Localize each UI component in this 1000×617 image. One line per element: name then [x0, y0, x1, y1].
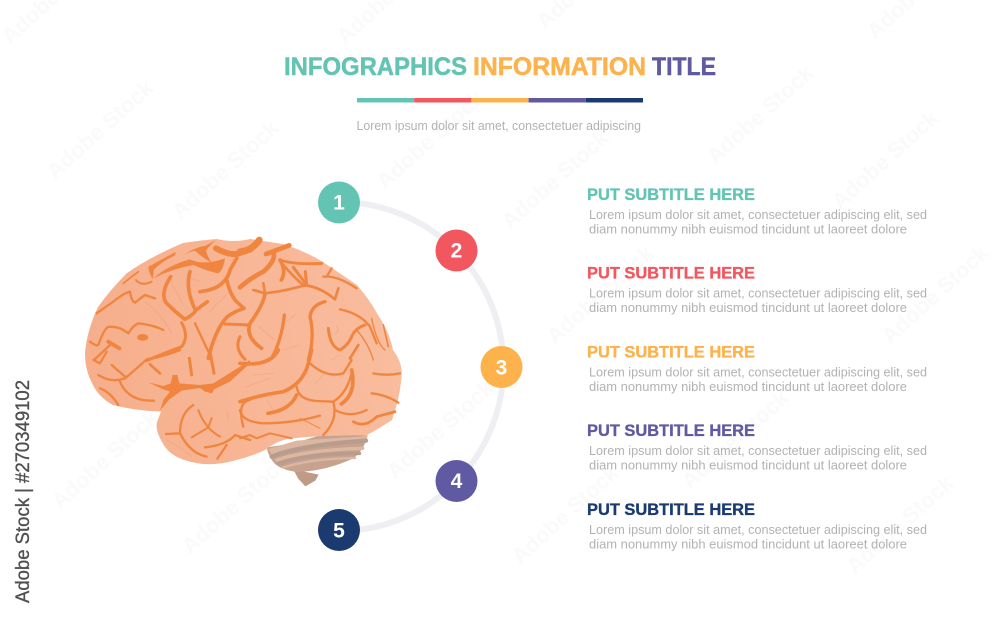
infographic canvas: Adobe Stock: [47, 405, 164, 514]
text block 2: [587, 264, 927, 315]
text block 3: diam nonummy nibh euismod tincidunt ut laoreet dolore: [589, 380, 907, 394]
text block 1: PUT SUBTITLE HERE: [587, 185, 755, 204]
cerebrum: [85, 239, 402, 464]
text block 4: PUT SUBTITLE HERE: [587, 421, 755, 440]
title: [284, 53, 716, 81]
cerebellum: [267, 433, 368, 486]
infographic canvas: Adobe Stock: [677, 385, 794, 494]
text block 1: diam nonummy nibh euismod tincidunt ut laoreet dolore: [589, 222, 907, 236]
text block 1: [587, 185, 927, 236]
text block 3: Lorem ipsum dolor sit amet, consectetuer adipiscing elit, sed: [589, 365, 927, 379]
sulci: lower right: [240, 350, 400, 438]
infographic canvas: Adobe Stock: [877, 240, 994, 349]
text block 4: [587, 421, 927, 473]
infographic canvas: Adobe Stock: [827, 105, 944, 214]
step marker 4: [436, 460, 478, 502]
timeline arc: [339, 202, 503, 531]
infographic canvas: Adobe Stock: [167, 115, 284, 224]
step marker 5: [318, 509, 360, 551]
infographic canvas: Adobe Stock: [507, 460, 624, 569]
step marker 3: 3: [496, 356, 507, 380]
text block 5: diam nonummy nibh euismod tincidunt ut laoreet dolore: [589, 537, 907, 551]
text block 1: Lorem ipsum dolor sit amet, consectetuer adipiscing elit, sed: [589, 208, 927, 222]
infographic canvas: Adobe Stock: [42, 75, 159, 184]
title: TITLE: [652, 53, 716, 81]
infographic canvas: Adobe Stock: [372, 85, 489, 194]
step marker 3: [480, 346, 522, 388]
title description: Lorem ipsum dolor sit amet, consectetuer adipiscing: [356, 119, 641, 133]
text block 5: PUT SUBTITLE HERE: [587, 500, 755, 519]
sulci: upper right: [240, 240, 388, 360]
text block 4: Lorem ipsum dolor sit amet, consectetuer adipiscing elit, sed: [589, 444, 927, 458]
infographic canvas: Adobe Stock: [177, 450, 294, 559]
sulci: lower left: [93, 350, 250, 459]
sulci: upper left: [90, 240, 251, 361]
stock credit: Adobe Stock | #270349102: [13, 380, 34, 603]
text block 5: [587, 500, 927, 551]
infographic canvas: Adobe Stock: [542, 240, 659, 349]
text block 2: PUT SUBTITLE HERE: [587, 264, 755, 283]
infographic canvas: Adobe Stock: [382, 375, 499, 484]
infographic canvas: Adobe Stock: [702, 60, 819, 169]
title colour bar: [357, 98, 643, 102]
step marker 1: 1: [333, 192, 345, 214]
title: INFOGRAPHICS: [284, 53, 467, 81]
text block 4: diam nonummy nibh euismod tincidunt ut laoreet dolore: [589, 459, 907, 473]
title: INFORMATION: [473, 53, 646, 81]
text block 2: diam nonummy nibh euismod tincidunt ut laoreet dolore: [589, 301, 907, 315]
infographic canvas: Adobe Stock: [497, 125, 614, 234]
infographic canvas: Adobe Stock: [842, 470, 959, 579]
step marker 2: [436, 230, 478, 272]
text block 3: PUT SUBTITLE HERE: [587, 342, 755, 361]
step marker 5: 5: [333, 520, 345, 542]
step marker 4: 4: [451, 470, 463, 493]
step marker 2: 2: [451, 240, 462, 262]
text block 2: Lorem ipsum dolor sit amet, consectetuer adipiscing elit, sed: [589, 287, 927, 301]
text block 5: Lorem ipsum dolor sit amet, consectetuer adipiscing elit, sed: [589, 523, 927, 537]
brain illustration: [85, 239, 402, 486]
text block 3: [587, 342, 927, 394]
step marker 1: [318, 182, 360, 224]
